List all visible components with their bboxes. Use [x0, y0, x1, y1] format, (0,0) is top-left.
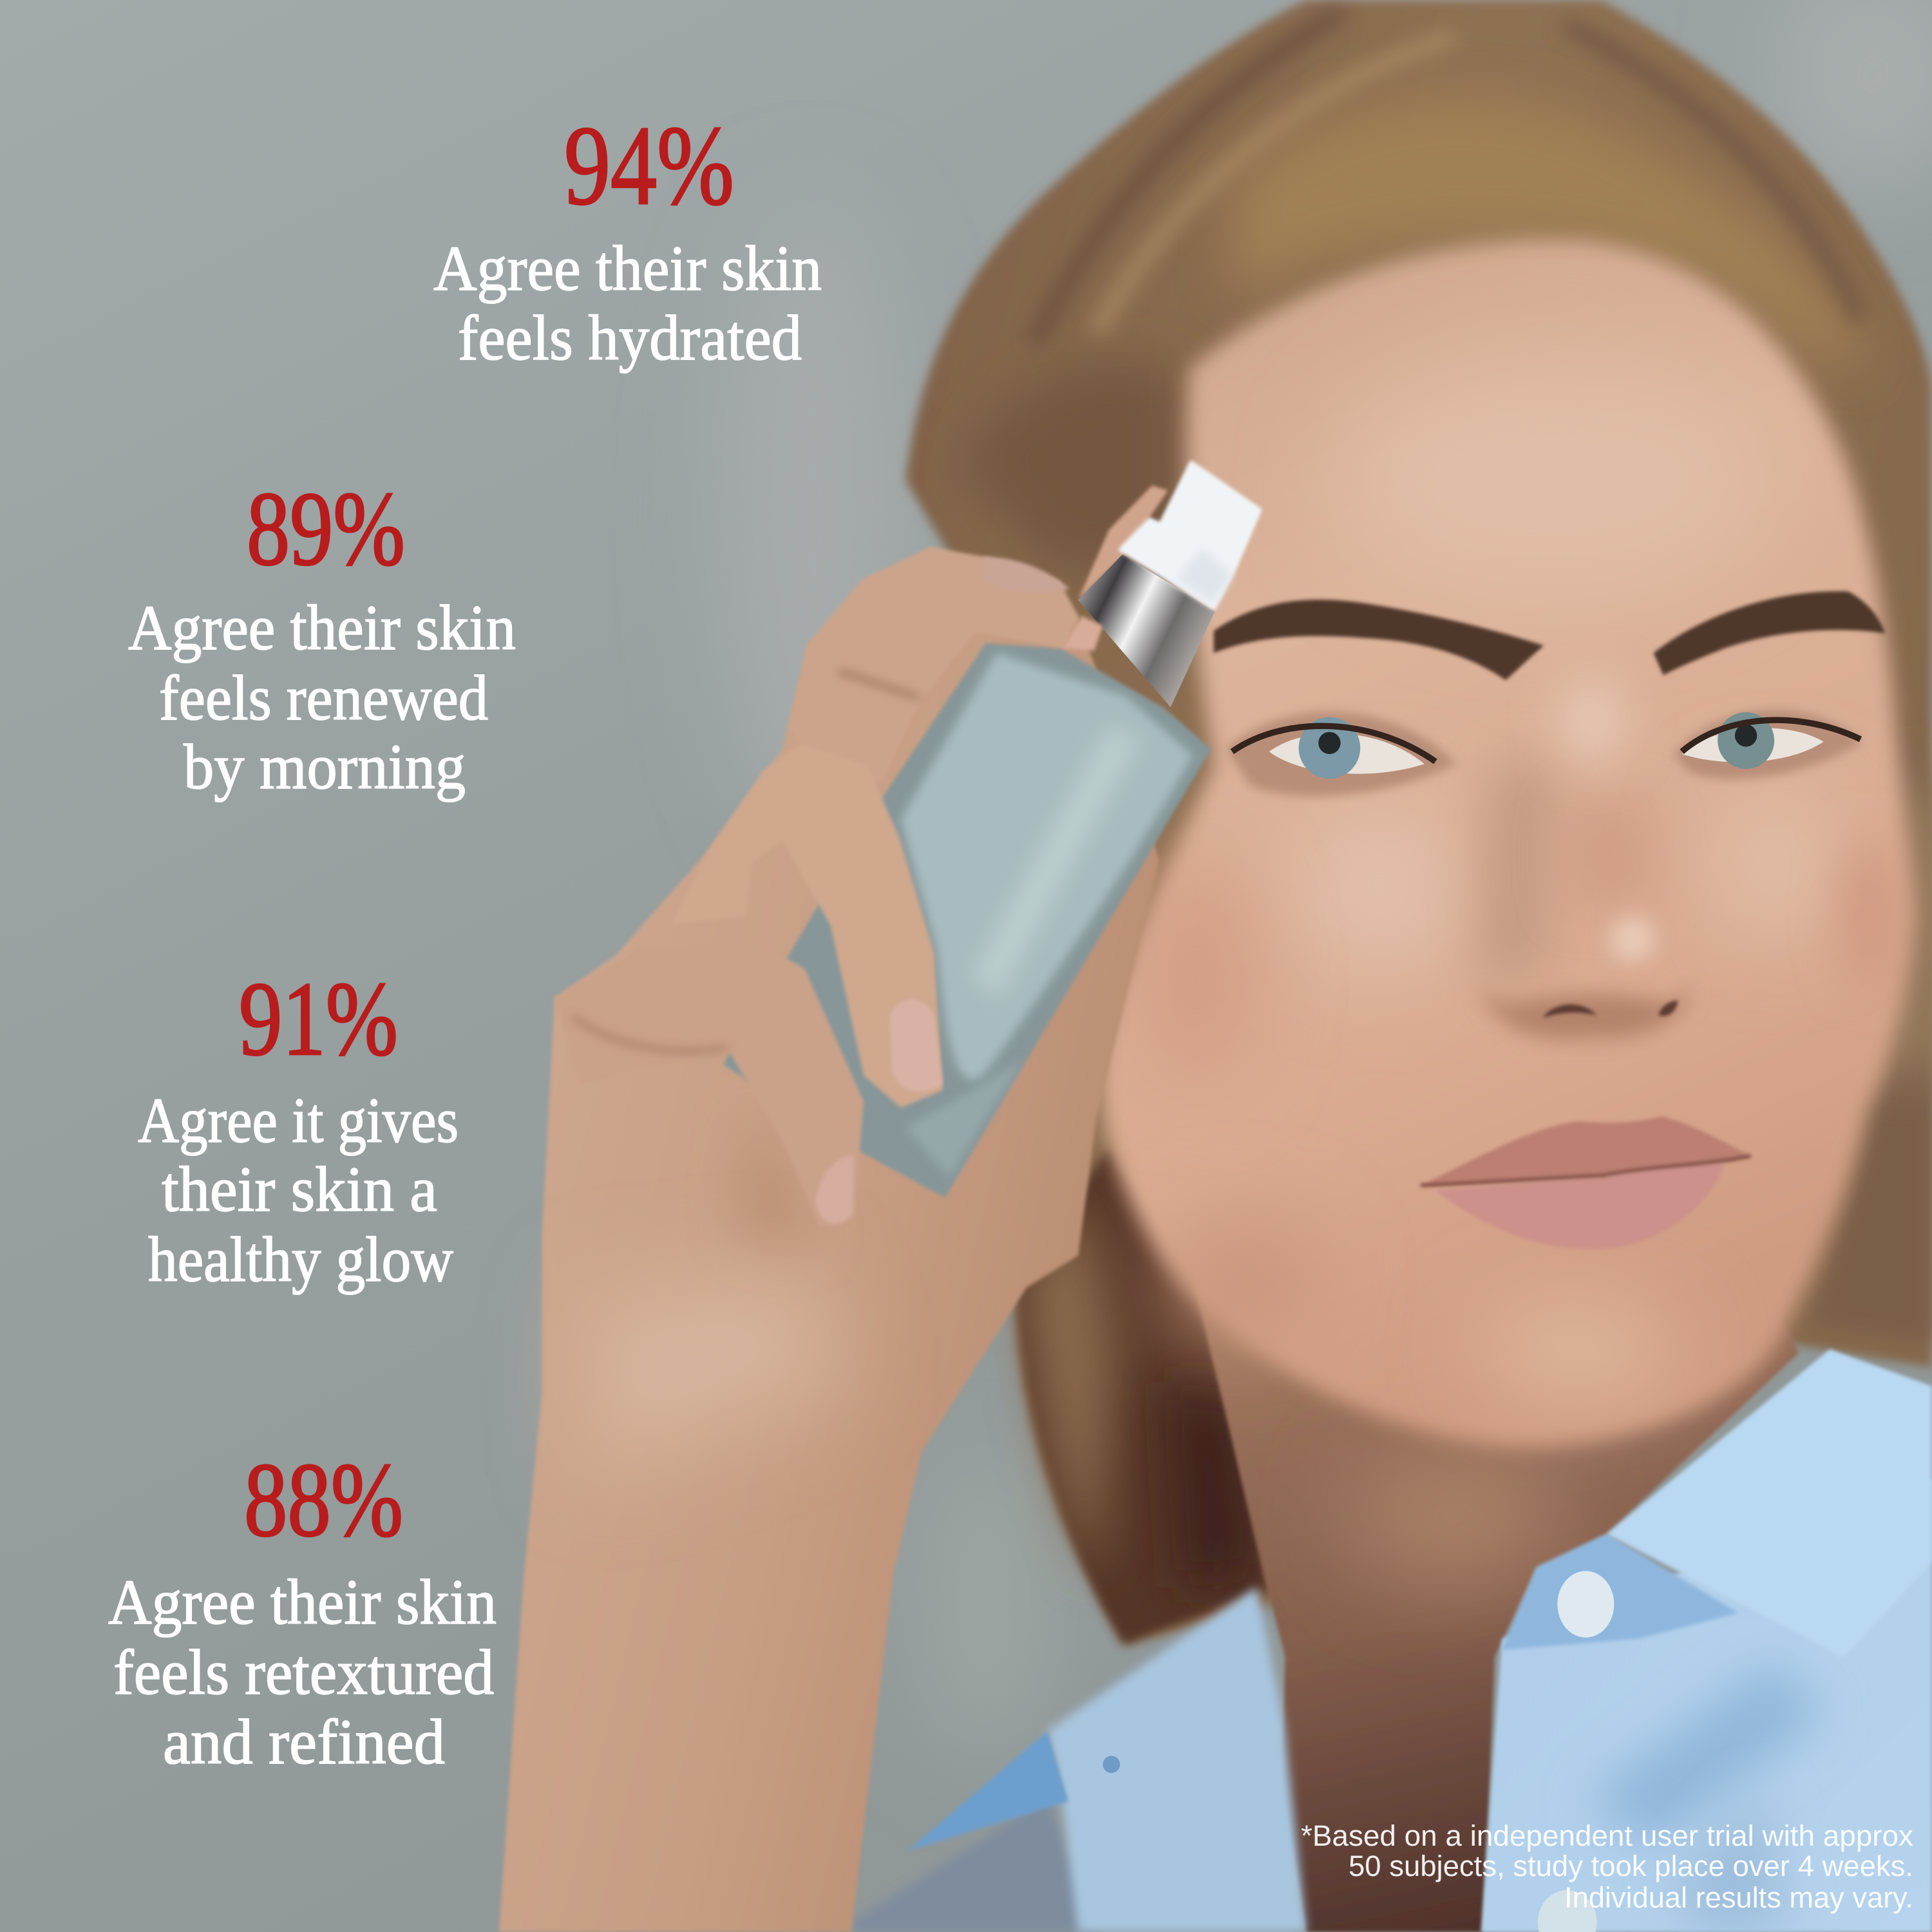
- stat: 88% retextured: 88%: [244, 1442, 403, 1558]
- left eyebrow: [1214, 600, 1544, 680]
- bottle metal collar: [1078, 554, 1215, 707]
- stat: 91% healthy glow: Agree it gives: [138, 1084, 459, 1156]
- ring finger: [554, 944, 864, 1227]
- stat: 89% renewed: by morning: [184, 731, 466, 802]
- hand and arm: [499, 486, 1168, 1932]
- stat: 94% hydrated: feels hydrated: [458, 302, 802, 374]
- hair: [905, 0, 1932, 1645]
- shirt: right placket and chest: [1481, 1349, 1932, 1932]
- right eye: [1673, 710, 1863, 779]
- stat: 91% healthy glow: [138, 961, 459, 1295]
- stat: 94% hydrated: Agree their skin: [433, 232, 822, 304]
- thumb: [788, 547, 1103, 788]
- collar button: [1557, 1571, 1614, 1638]
- stat: 88% retextured: feels retextured: [113, 1636, 494, 1708]
- neck side light: [1343, 1442, 1565, 1589]
- chest button: [1538, 1890, 1597, 1932]
- index finger: [672, 744, 943, 1108]
- left eye: [1226, 712, 1456, 797]
- right eyebrow: [1654, 591, 1885, 675]
- footnote: *Based on a independent user trial with approx: [1301, 1819, 1914, 1852]
- stat: 94% hydrated: [433, 103, 822, 374]
- finger behind cap: [1078, 486, 1168, 600]
- stat: 88% retextured: and refined: [163, 1706, 445, 1777]
- stat: 89% renewed: Agree their skin: [128, 592, 516, 663]
- right collar: [1607, 1349, 1932, 1657]
- stat: 89% renewed: feels renewed: [159, 662, 488, 734]
- stat: 91% healthy glow: 91%: [239, 961, 398, 1077]
- bottle cap: [1121, 463, 1259, 607]
- inner collar band: [1502, 1534, 1739, 1650]
- lips: [1421, 1116, 1751, 1249]
- serum bottle: [723, 463, 1259, 1198]
- nose: [1480, 679, 1692, 1039]
- footnote: 50 subjects, study took place over 4 weeks.: [1349, 1850, 1913, 1882]
- bottle bottom band: [905, 1059, 1023, 1177]
- stat: 94% hydrated: 94%: [564, 103, 734, 229]
- footnote: [1301, 1819, 1914, 1914]
- face: [1100, 240, 1913, 1447]
- stat: 88% retextured: Agree their skin: [108, 1566, 497, 1638]
- stat: 89% renewed: [128, 471, 516, 802]
- neck: [1194, 1282, 1799, 1932]
- stat: 89% renewed: 89%: [247, 471, 405, 587]
- stat: 88% retextured: [108, 1442, 497, 1777]
- dark hair lock beside neck: [1016, 1146, 1269, 1645]
- shirt: left collar and shoulder: [851, 1587, 1306, 1932]
- stat: 91% healthy glow: their skin a: [162, 1153, 437, 1225]
- footnote: Individual results may vary.: [1564, 1881, 1913, 1914]
- stat: 91% healthy glow: healthy glow: [148, 1224, 453, 1295]
